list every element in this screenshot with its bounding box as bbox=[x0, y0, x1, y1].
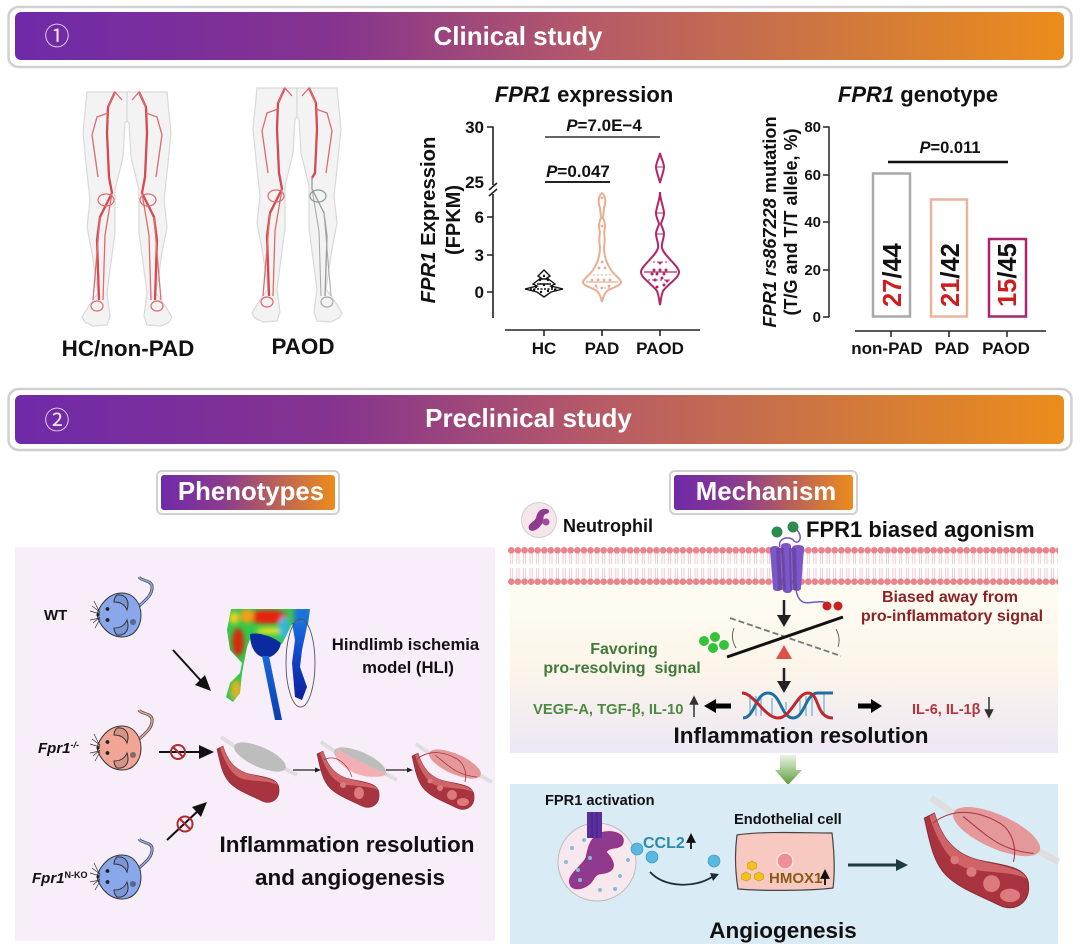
y tick labels: 30 bbox=[465, 118, 484, 137]
number 2: ② bbox=[44, 401, 70, 437]
bar PAOD bbox=[989, 239, 1026, 316]
icon: activated neutrophil bbox=[558, 812, 636, 901]
heading: FPR1 biased agonism: FPR1 biased agonism bbox=[806, 517, 1035, 542]
x tick labels: PAD bbox=[935, 339, 969, 358]
axes bbox=[487, 127, 700, 336]
x tick labels: PAOD bbox=[982, 339, 1030, 358]
y tick labels: 25 bbox=[465, 173, 484, 192]
arrow: left bold bbox=[704, 699, 731, 713]
significance bracket bbox=[888, 139, 1008, 162]
x tick labels: non-PAD bbox=[851, 339, 923, 358]
label: inflammation resolution and angiogenesis bbox=[219, 832, 475, 890]
label: Fpr1 N-KO: Fpr1 bbox=[32, 870, 65, 887]
y tick labels: 20 bbox=[804, 262, 821, 279]
label: downregulated cytokines: IL-6, IL-1β bbox=[912, 702, 981, 718]
illustration: ischemic vessel and muscle bbox=[217, 736, 297, 802]
label: hindlimb ischemia model bbox=[332, 635, 480, 677]
icon: DNA helix bbox=[742, 693, 833, 718]
violin PAD bbox=[583, 193, 621, 302]
arrow: stage two to three bbox=[386, 768, 413, 772]
icon: Fpr1 knockout mouse bbox=[90, 710, 152, 770]
y tick labels: 6 bbox=[475, 208, 484, 227]
y tick labels: 0 bbox=[813, 309, 821, 326]
y tick labels bbox=[804, 119, 821, 326]
label: biased away from pro-inflammatory signal: Biased away from bbox=[882, 589, 1018, 606]
label: favoring pro-resolving signal: Favoring bbox=[590, 641, 658, 658]
label: Fpr1 knockout: -/- bbox=[71, 740, 79, 750]
label: biased away from pro-inflammatory signal: pro-inflammatory signal bbox=[861, 608, 1043, 625]
label: endothelial cell: Endothelial cell bbox=[734, 812, 842, 828]
x tick labels bbox=[532, 339, 684, 358]
illustration: recovering vessel and muscle bbox=[317, 741, 397, 807]
y axis unit: (FPKM) bbox=[443, 185, 465, 255]
label: Fpr1 N-KO: N-KO bbox=[65, 870, 88, 880]
bar PAD bbox=[931, 200, 967, 316]
button: phenotypes: Phenotypes bbox=[178, 478, 324, 506]
chart: FPR1 expression violin bbox=[418, 82, 700, 358]
pro-resolving dots bbox=[699, 632, 729, 653]
x tick labels: PAD bbox=[585, 339, 619, 358]
label: upregulated factors: VEGF-A, TGF-β, IL-10 bbox=[533, 702, 683, 718]
bar PAOD: 15/45 bbox=[994, 243, 1022, 307]
label: FPR1 activation: FPR1 activation bbox=[545, 793, 655, 809]
chart: FPR1 genotype bars bbox=[760, 82, 1046, 358]
x tick labels bbox=[851, 339, 1030, 358]
image: thermal hindlimb perfusion bbox=[224, 605, 315, 720]
bar non-PAD bbox=[873, 174, 910, 316]
y axis label: FPR1 Expression bbox=[418, 137, 440, 303]
bar non-PAD: 27/44 bbox=[879, 242, 907, 307]
label: favoring pro-resolving signal: pro-resolving signal bbox=[543, 660, 701, 677]
arrow: knockout blocked bbox=[159, 745, 214, 759]
bar PAD: 21/42 bbox=[937, 243, 965, 307]
label: hindlimb ischemia model: model (HLI) bbox=[362, 658, 454, 677]
illustration: PAOD legs bbox=[252, 88, 342, 322]
arrow: to angiogenesis bbox=[848, 859, 908, 871]
blue central region bbox=[250, 633, 281, 657]
y tick labels: 60 bbox=[804, 167, 821, 184]
y tick labels: 40 bbox=[804, 214, 821, 231]
label: inflammation resolution and angiogenesis: Inflammation resolution bbox=[219, 832, 475, 857]
arrow: WT to model bbox=[173, 650, 211, 691]
label: downregulated cytokines bbox=[912, 697, 992, 718]
label: WT: WT bbox=[44, 607, 67, 624]
heading: preclinical study: Preclinical study bbox=[425, 403, 632, 433]
cell membrane bbox=[508, 547, 1058, 585]
banner: preclinical study bbox=[8, 389, 1072, 450]
panel: angiogenesis bbox=[510, 784, 1059, 944]
y tick labels bbox=[465, 118, 484, 302]
violin HC bbox=[525, 270, 563, 297]
label: neutrophil: Neutrophil bbox=[563, 516, 653, 536]
button: mechanism bbox=[670, 471, 857, 514]
violin PAOD bbox=[641, 153, 679, 305]
button: mechanism: Mechanism bbox=[696, 478, 836, 506]
panel: phenotypes bbox=[15, 547, 495, 941]
icon: endothelial cell bbox=[736, 832, 834, 890]
significance brackets: P=0.047 bbox=[546, 162, 610, 181]
number 1: ① bbox=[44, 17, 70, 53]
icon: Fpr1 N-KO mouse bbox=[90, 839, 152, 899]
label: Fpr1 knockout: Fpr1 bbox=[38, 740, 71, 757]
button: phenotypes bbox=[157, 471, 339, 514]
selection ellipse bbox=[286, 619, 315, 707]
y tick labels: 80 bbox=[804, 119, 821, 136]
x tick labels: PAOD bbox=[636, 339, 684, 358]
significance brackets bbox=[545, 116, 660, 182]
y axis unit: (T/G and T/T allele, %) bbox=[781, 128, 801, 316]
arrow: balance to DNA bbox=[777, 668, 791, 693]
label: upregulated factors bbox=[533, 697, 698, 718]
panel: mechanism bbox=[508, 502, 1058, 753]
banner: clinical study bbox=[8, 7, 1072, 67]
label: favoring pro-resolving signal bbox=[543, 641, 701, 677]
label: inflammation resolution: Inflammation resolution bbox=[673, 723, 929, 748]
label: inflammation resolution and angiogenesis: and angiogenesis bbox=[255, 865, 445, 890]
label: angiogenesis: Angiogenesis bbox=[709, 918, 857, 943]
molecules: CCL2 bbox=[631, 843, 720, 867]
chart title: FPR1 genotype bbox=[838, 82, 998, 107]
blue ischemic limb bbox=[292, 622, 308, 700]
arrow: N-KO blocked bbox=[167, 802, 207, 840]
illustration: angiogenic vessel and muscle bbox=[924, 797, 1059, 908]
label: PAOD: PAOD bbox=[271, 334, 335, 359]
y axis label: FPR1 rs867228 mutation bbox=[760, 116, 780, 328]
significance bracket: P=0.011 bbox=[919, 139, 981, 157]
ligand: green dots bbox=[772, 522, 798, 538]
illustration: recovered vessel and muscle bbox=[412, 743, 492, 809]
axes bbox=[823, 127, 1046, 337]
chart title: FPR1 expression bbox=[495, 82, 673, 107]
arrow: green down bbox=[775, 755, 802, 785]
label: HMOX1 up: HMOX1 bbox=[769, 870, 822, 887]
x tick labels: HC bbox=[532, 339, 556, 358]
y tick labels: 3 bbox=[475, 246, 484, 265]
illustration: healthy legs bbox=[82, 92, 172, 326]
y tick labels: 0 bbox=[475, 283, 484, 302]
label: CCL2 up: CCL2 bbox=[643, 835, 685, 852]
icon: WT mouse bbox=[90, 577, 152, 637]
ligand: red dots bbox=[822, 602, 842, 610]
heading: clinical study: Clinical study bbox=[433, 21, 603, 51]
icon: FPR1 receptor bbox=[770, 530, 826, 603]
label: hindlimb ischemia model: Hindlimb ischemia bbox=[332, 635, 480, 654]
arrow: curved to endothelial cell bbox=[650, 872, 719, 885]
icon: neutrophil bbox=[522, 502, 556, 538]
arrow: stage one to two bbox=[293, 768, 321, 772]
significance brackets: P=7.0E−4 bbox=[566, 116, 642, 135]
arrow: right bold bbox=[858, 699, 882, 713]
label: biased away from pro-inflammatory signal bbox=[861, 589, 1043, 625]
label: HC/non-PAD: HC/non-PAD bbox=[62, 336, 194, 361]
arrow: receptor to balance bbox=[777, 600, 791, 627]
icon: balance scale bbox=[727, 617, 843, 659]
